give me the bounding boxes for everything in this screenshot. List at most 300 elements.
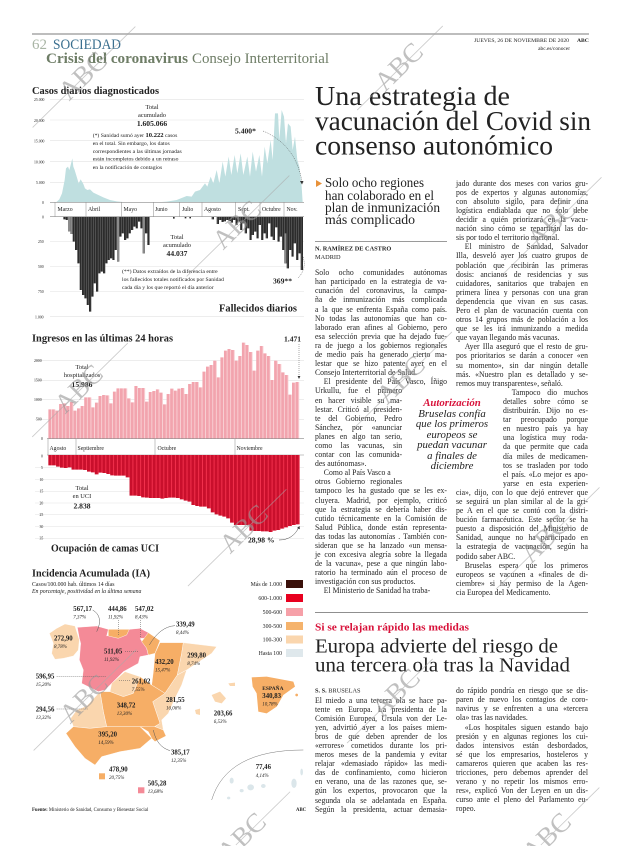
second article column 2: curso ante el pleno del Parlamento eu- [456, 794, 588, 804]
article body column 1: El presidente del País Vasco, Íñigo [324, 376, 447, 386]
section subtitle [46, 51, 329, 67]
article body column 1: cluyera. Madrid, por ejemplo, criticó [315, 495, 447, 505]
chart: daily cases and deaths: 1.000 [35, 316, 44, 320]
total hospitalised: Total [75, 364, 89, 371]
byline [315, 241, 447, 261]
map title: Incidencia Acumulada (IA) [32, 568, 150, 580]
legend: Más de 1.000 [251, 582, 282, 588]
date line: abc.es/conocer [538, 46, 570, 52]
article body column 2: nación sino cómo se repartirán las do- [456, 223, 588, 233]
ABC watermarks: ABC [52, 45, 113, 106]
map percentages: 13,30% [117, 712, 132, 717]
article body column 1: planes en algo tan serio, [315, 431, 402, 441]
article body column 1: a la que se enfrenta España como país. [315, 304, 447, 314]
article body column 2 [456, 178, 588, 597]
note on cases [93, 132, 183, 171]
article body column 1: ra de juego a los gobiernos regionales [315, 340, 447, 350]
second article column 2: «Los hospitales siguen estando bajo [465, 722, 588, 732]
month band: Julio [182, 207, 193, 213]
article body column 1: que la estrategia se debería haber dis- [315, 504, 447, 514]
total deaths: Total [170, 234, 184, 241]
headline: second article [315, 636, 570, 676]
note on deaths: (**) Datos extraídos de la diferencia entre [122, 268, 218, 275]
ABC watermarks: ABC [206, 194, 267, 255]
map values: 299,80 [187, 653, 207, 660]
article body column 2: día miles de medicamen- [503, 450, 588, 460]
map values: 203,66 [214, 711, 233, 718]
section subtitle: Consejo Interterritorial [192, 51, 329, 67]
map percentages: 20,75% [109, 776, 124, 781]
map values: 385,17 [171, 749, 190, 756]
map percentages: 15,47% [155, 668, 170, 674]
article body column 2: da que permite que cada [503, 441, 588, 451]
article body column 1: laborado eran afines al Gobierno, pero [315, 322, 447, 332]
source line: ABC [296, 808, 307, 813]
map values: 261,02 [132, 679, 151, 686]
article body column 2: Sanidad, aunque no ha participado en [456, 532, 588, 542]
map values: 444,86 [108, 606, 127, 613]
pull quote: Bruselas confía [418, 408, 486, 420]
chart: ICU occupancy: 20 [40, 502, 43, 506]
article body column 2: cia», dijo, con lo que dejó entrever que [456, 487, 588, 497]
callout: 5.400 [235, 126, 304, 184]
map values: 340,83 [262, 693, 282, 700]
article body column 1: ña de inmunización más complicada [315, 294, 447, 304]
month band: Junio [155, 207, 168, 213]
ABC watermarks: ABC [514, 508, 575, 569]
article body column 2: que vayan llegando más vacunas. [456, 332, 559, 342]
article body column 1: de la vacuna», pese a que ningún labo- [315, 558, 447, 568]
article body column 1: como las vacunas, sin [315, 440, 402, 450]
total hospitalised: 15.986 [72, 380, 93, 389]
article body column 1: te del Gobierno, Pedro [315, 413, 402, 423]
article body column 1: ratorio ha terminado aún el proceso de [315, 567, 447, 577]
second article column 2: camareros quieren que acaben las res- [456, 758, 588, 768]
subheadline: han colaborado en el [325, 188, 434, 203]
month band: Agosto [50, 446, 66, 452]
map percentages: 12,35% [171, 759, 186, 764]
mini Spain and Canary Islands [212, 677, 303, 800]
second article column 1: relajar «demasiado rápido» las medi- [315, 758, 447, 768]
month band: Octubre [158, 446, 177, 452]
chart: ICU occupancy: 30 [40, 525, 43, 529]
article body column 2: pos de expertos y algunas autonomías, [456, 187, 588, 197]
total ICU: Total [75, 485, 89, 492]
chart title: Ingresos: Ingresos en las últimas 24 horas [32, 334, 173, 344]
map percentages: 11,92% [108, 616, 123, 620]
map subtitle: Casos/100.000 hab. últimos 14 días [32, 582, 115, 588]
callout: 369: 369** [273, 276, 292, 286]
main headline [315, 80, 591, 160]
chart: daily cases and deaths: 15.000 [34, 140, 45, 144]
month band: Nov. [286, 207, 298, 213]
chart: hospital admissions: 0 [41, 437, 43, 441]
map percentages: 8,44% [176, 631, 189, 636]
article body column 2: dependencia que vivan en sus casas. [456, 296, 588, 306]
article body column 2: El ministro de Sanidad, Salvador [465, 241, 588, 251]
article body column 2: más. «Nuestro plan es detallado y se- [456, 369, 588, 379]
chart: daily cases and deaths: 10.000 [34, 160, 45, 164]
map values: 547,02 [135, 606, 154, 613]
map percentages: 10,78% [262, 702, 278, 708]
article body column 1: Consejo Interterritorial de Salud. [315, 367, 417, 377]
pull quote: diciembre [431, 460, 473, 472]
second article column 1: El miedo a una tercera ola se hace pa- [315, 694, 447, 704]
map percentages: 6,53% [214, 720, 227, 725]
article body column 2: se seguirá un plan similar al de la gri- [456, 496, 588, 506]
month band: Noviembre [236, 446, 263, 452]
article body column 2: detalles sobre cómo se [503, 396, 588, 406]
second article rule [315, 612, 588, 613]
map values: ESPAÑA [262, 684, 284, 692]
kicker: second article: Si se relajan rápido las medidas [315, 622, 469, 634]
chart title: Casos diarios: Casos diarios diagnosticados [32, 86, 159, 97]
chart title: Fallecidos diarios: Fallecidos diarios [219, 304, 297, 314]
article body column 2: remos muy transparentes», señaló. [456, 378, 563, 388]
article body column 2: ciembre» si hay permiso de la Agen- [456, 578, 588, 588]
map percentages: 13,68% [148, 790, 163, 795]
chart: daily cases and deaths: 0 [42, 216, 44, 220]
article body column 2: distribuirán. Dijo no es- [503, 405, 588, 415]
note on deaths: cada día y los que reportó el día anterior [122, 285, 214, 291]
second article column 1: segunda ola se adelantada en España. [315, 795, 447, 805]
ABC watermarks: ABC [213, 498, 274, 559]
main headline: vacunación del Covid sin [315, 105, 591, 136]
chart: daily cases and deaths: 20.000 [34, 119, 45, 123]
second article column 1: tente en Europa. La presidenta de la [315, 704, 447, 714]
article body column 2: pos prioritarios se darán a conocer «en [456, 350, 588, 360]
second article column 2 [456, 685, 588, 813]
map percentages: 8,74% [187, 662, 200, 667]
article body column 2: sis por todo el territorio nacional. [456, 232, 559, 242]
source line: Fuente: Ministerio de Sanidad, Consumo y Bienestar Social [32, 808, 149, 813]
second article column 2: paren de nuevo los contagios de coro- [456, 694, 588, 704]
article body column 2: yarse en esta experien- [503, 478, 588, 488]
article body column 2: que se les irá inmunizando a medida [456, 323, 588, 333]
total deaths [163, 234, 191, 258]
article body column 1 [314, 267, 447, 595]
pull quote: que los primeros [416, 418, 488, 430]
bars: ICU [48, 455, 300, 532]
headline: second article: una tercera ola tras la Navidad [315, 654, 570, 676]
map percentages: 7,37% [73, 616, 86, 620]
map values: 567,17 [73, 606, 93, 613]
second article column 1 [315, 694, 447, 814]
chart: hospital admissions: 1000 [34, 398, 42, 402]
map values: 272,90 [54, 636, 73, 643]
month band: Septiembre [78, 446, 104, 452]
pull quote: Autorización [423, 397, 481, 409]
map values: 596,95 [36, 674, 55, 681]
date line [474, 38, 589, 52]
note on cases: están incompletos debido a un retraso [93, 156, 179, 162]
article body column 2: en nuestro país ya hay [503, 423, 588, 433]
article body column 1: Salud Pública, donde están representa- [315, 522, 447, 532]
area: daily cases [56, 110, 303, 202]
pull quote: a finales de [427, 450, 477, 462]
main headline: Una estrategia de [315, 80, 510, 111]
map values: 511,05 [104, 649, 123, 656]
second article column 1: gún los expertos, provocaron que la [315, 785, 447, 795]
second article column 1: yen, advirtió ayer a los países miem- [315, 722, 447, 732]
map values: 281,55 [166, 697, 185, 704]
map values: 505,28 [148, 780, 167, 787]
chart: daily cases and deaths: 500 [38, 265, 44, 269]
map subtitle [31, 582, 142, 595]
header rule and section label: 62 [32, 37, 47, 53]
article body column 2: decidir a quién priorizará en la vacu- [456, 214, 588, 224]
second article column 1: Comisión Europea, Ursula von der Le- [315, 713, 447, 723]
map squares for Ceuta and Melilla [99, 773, 144, 793]
article body column 1: han participado en la estrategia de va- [315, 276, 447, 286]
article body column 1: cunación del coronavirus, la campa- [315, 285, 447, 295]
map percentages: 16,06% [166, 706, 181, 712]
ABC watermarks: ABC [370, 349, 431, 410]
article body column 2: otros 14 grupos más de población a los [456, 314, 588, 324]
legend: 300-500 [263, 624, 282, 630]
map values: 432,20 [155, 659, 174, 666]
bars: admissions [48, 343, 299, 439]
note on cases: (*) Sanidad sumó ayer 10.222 casos [93, 132, 178, 139]
note on cases: en el total. Sin embargo, los datos [93, 141, 170, 147]
chart: hospital admissions: 500 [36, 418, 42, 422]
article body column 2: el país. «Lo mejor es apo- [503, 469, 588, 479]
total hospitalised [64, 364, 101, 389]
month band: Mayo [124, 207, 137, 213]
source line [32, 808, 307, 813]
chart title: Ocupación: Ocupación de camas UCI [51, 544, 159, 554]
second article column 1: das de confinamiento, como hicieron [315, 767, 447, 777]
second article column 2: ola» tras las navidades. [456, 712, 528, 722]
byline: second article: S. S. BRUSELAS [315, 688, 361, 694]
callout: 28,98 %: 28,98 % [248, 536, 275, 544]
byline: N. RAMÍREZ DE CASTRO [315, 244, 391, 252]
article body column 2: Bruselas espera que los primeros [465, 560, 588, 570]
chart: daily cases and deaths: 250 [38, 240, 44, 244]
article body column 1: sideran que se ha lanzado «un mensa- [315, 540, 447, 550]
total cases [137, 104, 167, 128]
second article column 2: res», explicó Von der Leyen en un dis- [456, 785, 588, 795]
article body column 2: la estrategia de vacunación, según ha [456, 541, 588, 551]
subheadline: más complicado [325, 212, 415, 227]
ABC watermarks: ABC [365, 662, 426, 723]
second article column 2: ropeo. [456, 803, 476, 813]
chart: ICU occupancy: 15 [40, 490, 43, 494]
second article column 1: Según la presidenta, actuar demasia- [315, 804, 447, 814]
article body column 2: pe A en el que se contó con la distri- [456, 505, 588, 515]
article body column 2: con absoluto sigilo, para definir una [456, 196, 588, 206]
map percentages: 8,78% [54, 645, 67, 650]
bars: daily deaths [63, 217, 303, 312]
chart: daily cases and deaths: 0 [42, 201, 44, 205]
note on deaths: los fallecidos totales notificados por Sanidad [122, 276, 224, 283]
map percentages: 13,32% [36, 716, 51, 721]
article body column 1: lestar. Criticó al presiden- [315, 404, 402, 414]
article body column 2: bución farmacéutica. Este sector se ha [456, 514, 588, 524]
article body column 2: su momento», sin dar ningún detalle [456, 360, 588, 370]
pull quote: puedan vacunar [417, 439, 487, 451]
article body column 1: El Ministerio de Sanidad ha traba- [324, 585, 430, 595]
article body column 2: cia Europea del Medicamento. [456, 587, 551, 597]
article body column 1: tampoco les ha gustado que se les ex- [315, 485, 447, 495]
article body column 1: contar con las comunida- [315, 449, 402, 459]
ABC watermarks: ABC [521, 193, 582, 254]
article body column 2: Tampoco dio muchos [512, 387, 588, 397]
article body column 2: Pero el plan de vacunación cuenta con [456, 305, 588, 315]
article body column 2: Ayer Illa aseguró que el resto de gru- [465, 341, 588, 351]
map values: 348,72 [117, 702, 136, 709]
chart: daily cases and deaths: 750 [38, 290, 44, 294]
total ICU: en UCI [73, 493, 91, 500]
map values: 77,46 [256, 764, 272, 771]
second article column 2: verano y no repetir los mismos erro- [456, 776, 588, 786]
callout: 1.471 [284, 334, 301, 379]
article body column 2: jado durante dos meses con varios gru- [456, 178, 588, 188]
month band: Agosto [204, 207, 221, 213]
article body column 2: población que recibirán las primeras [456, 260, 588, 270]
total cases: acumulado [138, 112, 166, 119]
map of Spain [36, 606, 303, 800]
subheadline: plan de inmunización [325, 200, 440, 215]
map values: 294,56 [36, 707, 55, 714]
map values [36, 606, 284, 787]
second article column 2: do rápido pondría en riesgo que se dis- [456, 685, 588, 695]
second article column 2: navirus y se enfrenten a una «tercera [456, 703, 588, 713]
total hospitalised: hospitalizados [64, 372, 101, 379]
article body column 1: otros Gobierno regionales [315, 476, 402, 486]
legend: 100-300 [263, 638, 282, 644]
map percentages [36, 616, 278, 795]
header rule and section label [32, 33, 589, 53]
article body column 1: No todas las autonomías que han co- [315, 313, 447, 323]
article body column 1: je con excesiva alegría sobre la llegada [315, 549, 447, 559]
month band: Octubre [262, 207, 281, 213]
map values: 339,49 [176, 622, 195, 629]
month band [47, 439, 304, 455]
map percentages: 15,20% [36, 683, 51, 688]
article body column 2: cuidadores, sanitarios que trabajen en [456, 278, 588, 288]
header rule and section label: SOCIEDAD [53, 37, 121, 53]
chart: ICU occupancy: 5 [41, 466, 43, 470]
chart: daily cases and deaths: 25.000 [34, 98, 45, 102]
chart: hospital admissions: 1500 [34, 378, 42, 382]
second article column 1: «errores» cometidos durante los pri- [315, 740, 447, 750]
legend: 500-600 [263, 610, 282, 616]
mainland regions [49, 624, 235, 765]
month band [50, 202, 304, 217]
note on cases: en la notificación de contagios [93, 164, 163, 171]
map percentages: 4,14% [256, 774, 269, 779]
article body column 1: en hacer visible su ma- [315, 394, 402, 404]
total deaths: acumulado [163, 242, 191, 249]
total deaths: 44.037 [167, 249, 188, 258]
second article column 2: presión y en algunas regiones los cui- [456, 731, 588, 741]
map values: 395,20 [98, 731, 118, 738]
second article column 2: sé que los empresarios, hosteleros y [456, 749, 588, 759]
subheadline [316, 175, 440, 227]
chart: hospital admissions [34, 334, 304, 455]
total ICU: 2.838 [73, 502, 91, 510]
article body column 2: podido saber ABC. [456, 551, 515, 561]
second article column 1: bros de que deben aprender de los [315, 731, 447, 741]
legend: Hasta 100 [259, 651, 282, 657]
total ICU [73, 485, 91, 510]
chart: ICU occupancy: 35 [40, 536, 43, 540]
article body column 1: Sánchez, por «anunciar [315, 422, 402, 432]
date line: ABC [577, 38, 589, 44]
callout: 5.400: 5.400* [235, 126, 256, 136]
article body column 1: investigación con sus productos. [315, 576, 416, 586]
map percentages: 14,59% [98, 741, 114, 746]
chart: ICU occupancy: 25 [40, 513, 43, 517]
second article column 2: tricciones, pero debemos aprender del [456, 767, 588, 777]
article body column 1: des autónomas». [315, 458, 367, 468]
legend [251, 580, 303, 657]
callout: 369 [273, 254, 304, 286]
second article column 1: en verano, una de las razones que, se- [315, 776, 447, 786]
article body column 2: Illa, desveló ayer los cuatro grupos de [456, 250, 588, 260]
chart: ICU occupancy: 0 [41, 454, 43, 458]
note on deaths [122, 268, 224, 291]
map values: 478,90 [109, 767, 128, 774]
date line: JUEVES, 26 DE NOVIEMBRE DE 2020 [474, 38, 569, 44]
article body column 1: de medio país ha generado cierto ma- [315, 349, 447, 359]
callout: 1.471: 1.471 [284, 334, 301, 344]
pull quote [416, 397, 488, 472]
section subtitle: Crisis del coronavirus [46, 51, 188, 67]
ABC watermarks: ABC [48, 358, 109, 419]
month band: Sept. [238, 207, 250, 213]
month band: Marzo [58, 207, 73, 213]
pull quote: europeos se [427, 429, 477, 441]
article body column 1: Solo ocho comunidades autónomas [315, 267, 447, 277]
map percentages: 8,43% [135, 616, 148, 620]
article body column 1: Urkullu, fue el primero [315, 385, 402, 395]
article body column 2: tar preocupado porque [503, 414, 588, 424]
byline: MADRID [315, 254, 341, 261]
article body column 2: dosis: ancianos de residencias y sus [456, 269, 588, 279]
chart: ICU occupancy [35, 454, 304, 544]
chart: ICU occupancy: 10 [40, 478, 43, 482]
subheadline: Solo ocho regiones [325, 175, 424, 190]
map percentages: 7,55% [132, 688, 145, 693]
legend: 600-1.000 [258, 596, 282, 602]
article body column 2: tos se trasladen por todo [503, 460, 588, 470]
second article column 2: dados intensivos están desbordados, [456, 740, 588, 750]
article body column 2: europeos se vacunen a «finales de di- [456, 569, 588, 579]
headline: second article: Europa advierte del riesgo de [315, 636, 558, 658]
article body column 2: primera línea y personas con una gran [456, 287, 588, 297]
note on cases: correspondientes a las últimas jornadas [93, 149, 183, 155]
article body column 1: esa selección previa que ha dejado fue- [315, 331, 447, 341]
map percentages: 11,92% [104, 658, 119, 663]
map leader lines [57, 610, 175, 751]
chart: daily cases and deaths [34, 98, 304, 320]
article body column 2: puesto a disposición del Ministerio de [456, 523, 588, 533]
article body column 2: una logística muy roda- [503, 432, 588, 442]
callout: 28,98 % [248, 526, 300, 544]
article body column 1: lestar que se hizo patente ayer en el [315, 358, 447, 368]
total cases: 1.605.066 [137, 119, 167, 128]
second article column 1: meros meses de la pandemia y evitar [315, 749, 447, 759]
article body column 1: das todas las autonomías . También con- [315, 531, 447, 541]
main headline: consenso autonómico [315, 130, 553, 160]
chart: hospital admissions: 2000 [34, 359, 42, 363]
ABC watermarks: ABC [53, 668, 114, 729]
ABC watermarks: ABC [368, 36, 429, 97]
article body column 1: cutido técnicamente en la Comisión de [315, 513, 447, 523]
total cases: Total [145, 104, 159, 111]
